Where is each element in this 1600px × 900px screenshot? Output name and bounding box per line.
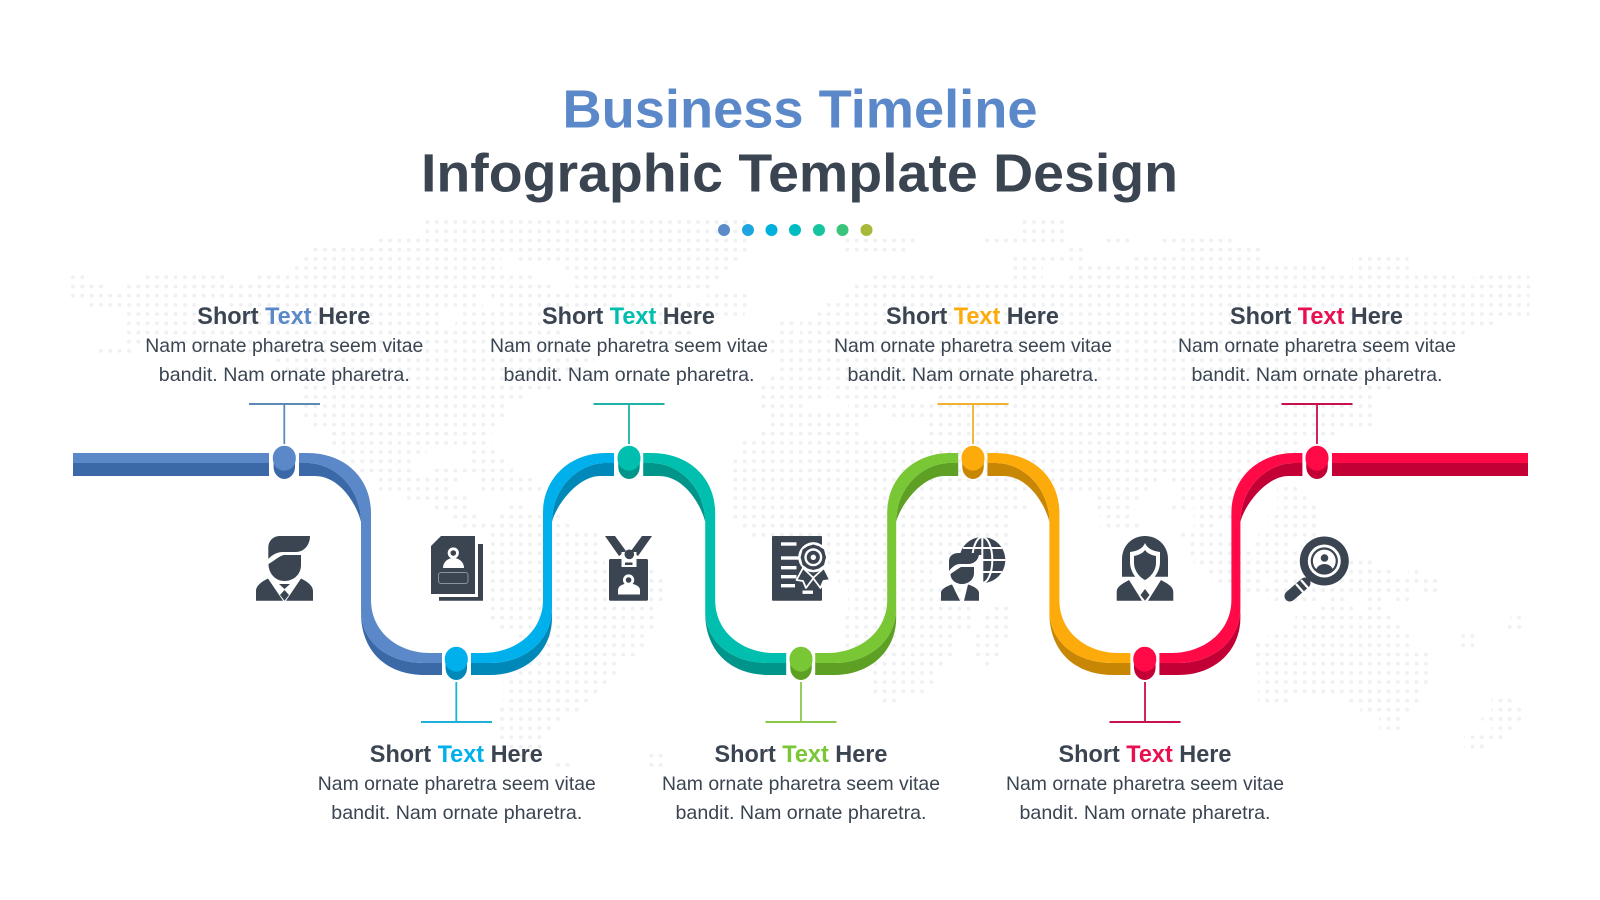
heading 3: Short Text Here [542,303,715,330]
text block 5 [834,303,1112,386]
pipe segment 2 cyan [471,453,614,675]
pipe segment 5 yellow [987,453,1130,675]
body 1 [145,335,423,386]
body 6: bandit. Nam ornate pharetra. [1020,802,1270,824]
pipe segment 1 blue [299,453,442,675]
pipe segment 3 teal [643,453,786,675]
text block 4 [662,741,940,824]
timeline pipe [73,453,1528,675]
body 6 [1006,773,1284,824]
icon: person with globe [941,537,1005,601]
body 7 [1178,335,1456,386]
connector 6 [1110,682,1180,723]
body 2: Nam ornate pharetra seem vitae [318,773,596,795]
decorative dot row [718,224,872,236]
body 3: Nam ornate pharetra seem vitae [490,335,768,357]
background: dotted world map [74,222,1528,765]
body 1: bandit. Nam ornate pharetra. [159,364,410,386]
connector 1 [249,403,320,444]
text block 2 [318,741,596,824]
body 3: bandit. Nam ornate pharetra. [504,364,754,386]
title line 1: Business Timeline [562,80,1038,140]
pipe segment 6 red [1159,453,1302,675]
title line 2: Infographic Template Design [421,144,1178,204]
body 5: Nam ornate pharetra seem vitae [834,335,1112,357]
icon: certificate with seal [772,536,830,601]
body 5: bandit. Nam ornate pharetra. [848,364,1098,386]
right end bar [1332,453,1528,476]
icon: document with profile [431,533,483,601]
node 4 green [790,647,812,681]
icon: businessman [256,536,313,601]
body 1: Nam ornate pharetra seem vitae [145,335,423,357]
node 7 red [1306,446,1328,480]
connector 4 [766,682,836,723]
heading 4: Short Text Here [714,741,888,768]
body 5 [834,335,1112,386]
heading 5: Short Text Here [886,303,1059,330]
body 6: Nam ornate pharetra seem vitae [1006,773,1284,795]
body 2: bandit. Nam ornate pharetra. [331,802,582,824]
text block 6 [1006,741,1284,824]
icon: id badge [605,536,652,601]
left start bar [73,453,269,476]
icon: magnifier with person [1290,536,1349,596]
pipe segment 4 green [815,453,958,675]
node 2 cyan [445,647,468,681]
text block 1 [145,303,423,386]
title [421,80,1178,204]
body 7: bandit. Nam ornate pharetra. [1192,364,1442,386]
body 4: Nam ornate pharetra seem vitae [662,773,940,795]
node 5 yellow [962,446,984,480]
body 2 [318,773,596,824]
body 4: bandit. Nam ornate pharetra. [676,802,926,824]
heading 7: Short Text Here [1230,303,1403,330]
body 7: Nam ornate pharetra seem vitae [1178,335,1456,357]
heading 6: Short Text Here [1058,741,1232,768]
text block 3 [490,303,768,386]
text block 7 [1178,303,1456,386]
connector 3 [594,403,664,444]
connector 5 [938,403,1008,444]
connector 2 [421,682,492,723]
connector 7 [1282,403,1352,444]
body 4 [662,773,940,824]
node 6 red [1133,647,1156,681]
heading 1: Short Text Here [197,303,370,330]
icon: businesswoman [1117,536,1173,601]
node 3 teal [618,446,640,480]
node 1 blue [273,446,296,480]
heading 2: Short Text Here [370,741,543,768]
body 3 [490,335,768,386]
